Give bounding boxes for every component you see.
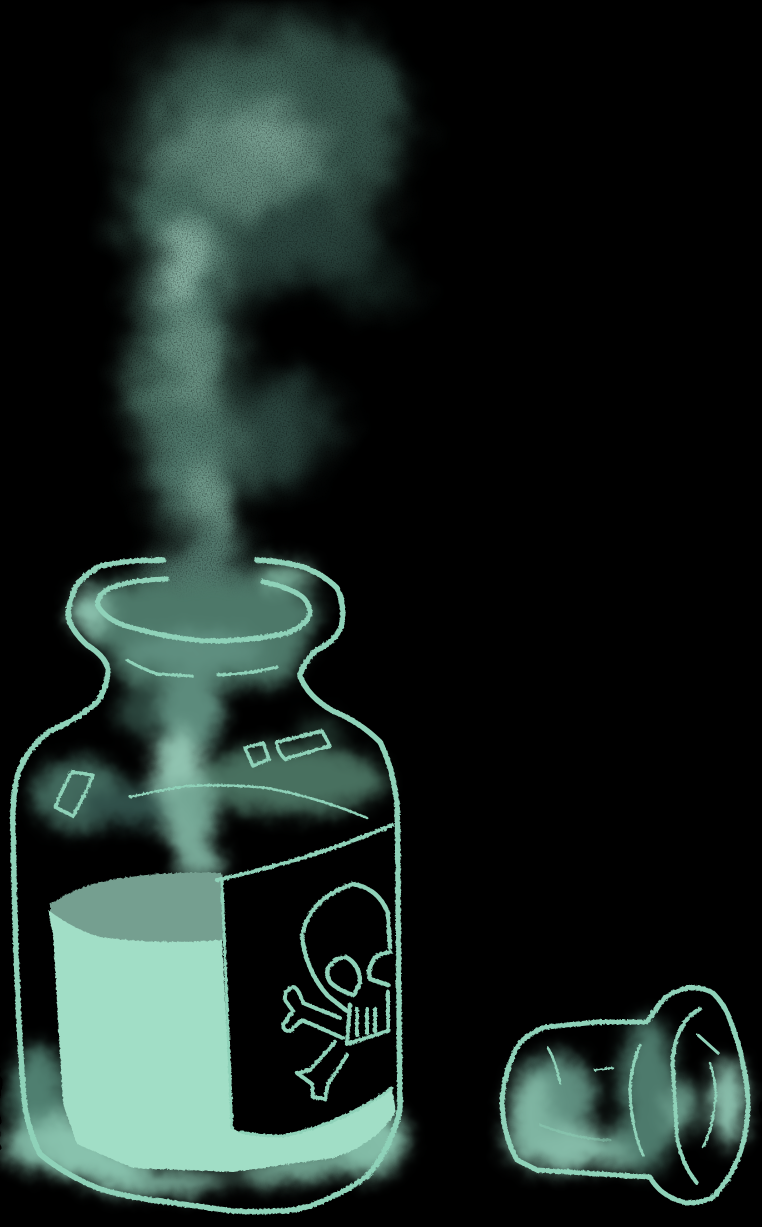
bottle haze (2, 563, 406, 1192)
stopper outline (502, 988, 748, 1203)
liquid (48, 872, 396, 1172)
skull and crossbones (283, 884, 390, 1099)
liquid surface (50, 872, 224, 943)
neck lines (127, 660, 192, 676)
smoke plume (120, 30, 410, 650)
right socket (369, 952, 390, 985)
stopper (502, 988, 748, 1203)
jaw (347, 992, 388, 1044)
label panel (222, 826, 392, 1136)
glint right large (277, 731, 330, 759)
glint left (55, 772, 93, 816)
eye socket (327, 957, 360, 995)
neck haze (74, 580, 320, 685)
shoulder curve (130, 785, 367, 818)
stopper haze (507, 1017, 746, 1173)
label left edge (222, 882, 232, 1128)
label top edge (217, 825, 392, 880)
label bottom edge (240, 1088, 392, 1136)
skull outline (302, 884, 390, 1011)
shoulder haze (34, 759, 126, 831)
smoke column (132, 210, 330, 650)
inner rim ellipse (98, 579, 310, 641)
bottom haze (10, 1045, 66, 1155)
liquid body (48, 910, 396, 1172)
bottle outline (13, 560, 400, 1212)
crossbone upper (283, 987, 343, 1038)
crossbone lower (297, 1042, 347, 1099)
outer contour (13, 560, 400, 1212)
glint right small (245, 743, 269, 766)
smoke cloud top (120, 30, 410, 307)
